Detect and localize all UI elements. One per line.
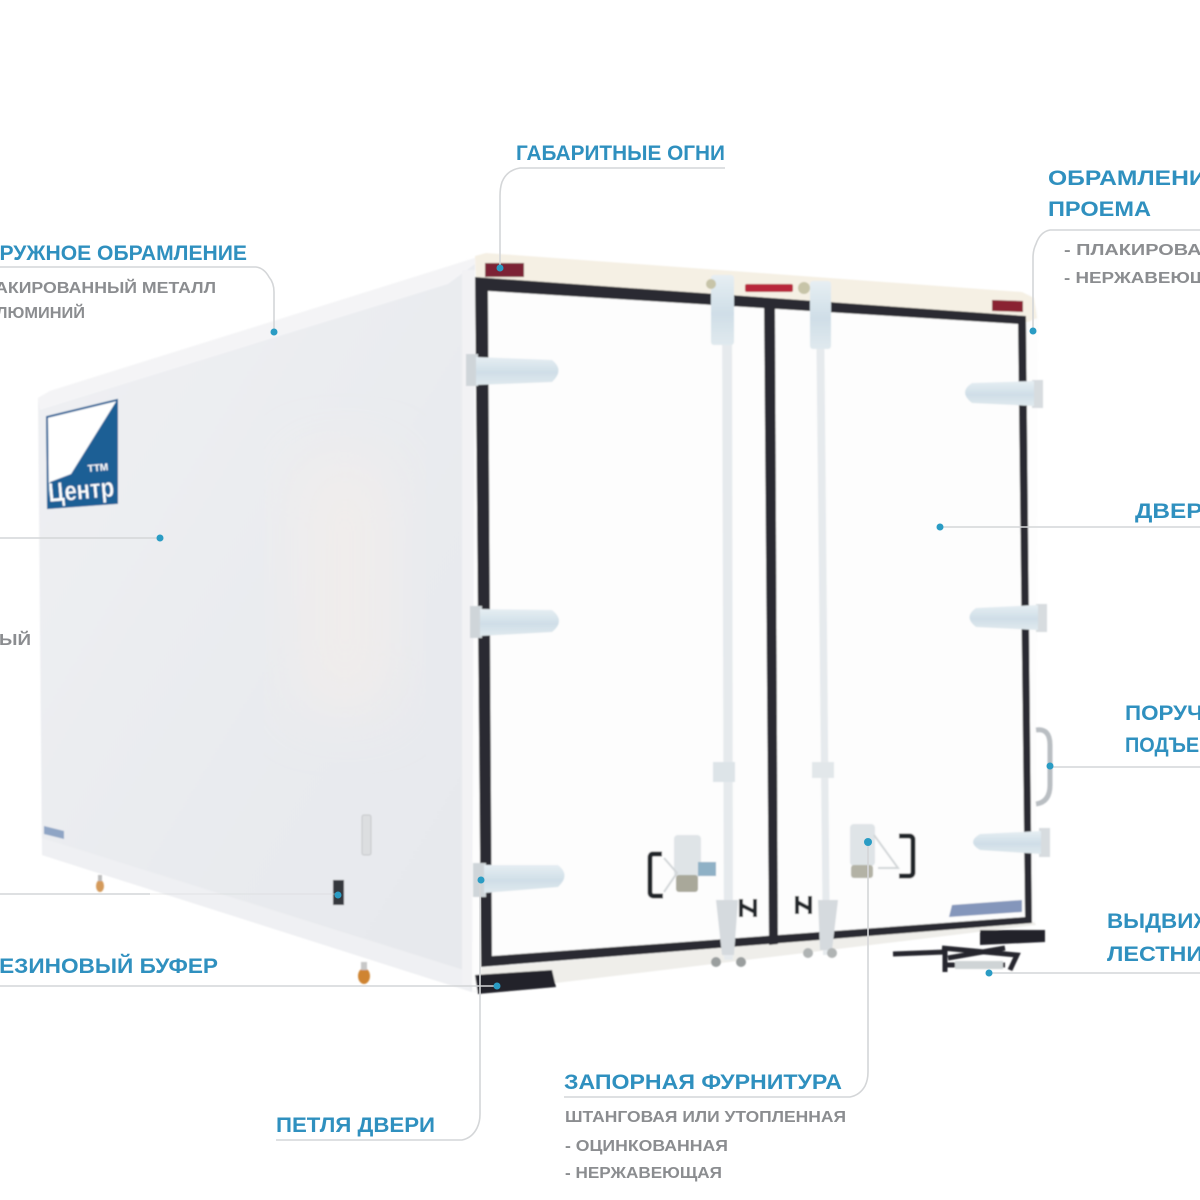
logo: ТТМ [87, 462, 109, 475]
lock rods [706, 275, 838, 967]
callout: боковая панель [0, 534, 164, 649]
callout: петля двери: ПЕТЛЯ ДВЕРИ [276, 1113, 435, 1137]
callout: габаритные огни [496, 141, 725, 272]
feet [96, 875, 370, 984]
logo [47, 400, 117, 508]
callout: двери [936, 499, 1200, 530]
callout: габаритные огни: ГАБАРИТНЫЕ ОГНИ [516, 141, 725, 165]
callout: обрамление проема: ОБРАМЛЕНИЕ [1048, 166, 1200, 190]
callout: запорная фурнитура: ЗАПОРНАЯ ФУРНИТУРА [564, 1070, 842, 1094]
door lock handles [650, 824, 1022, 917]
callout: поручень подъема [1046, 701, 1200, 770]
logo: Центр [47, 472, 115, 508]
callout: выдвижная лестница [986, 909, 1200, 976]
callout: запорная фурнитура: - НЕРЖАВЕЮЩАЯ [565, 1165, 722, 1182]
door seal frame [475, 277, 1032, 967]
side details: vent and small label [44, 815, 371, 905]
callout: наружное обрамление [0, 241, 278, 336]
rubber buffers and ladder [475, 930, 1045, 994]
marker lights [485, 263, 1023, 312]
van box body [38, 253, 1050, 994]
callout: резиновый буфер [0, 953, 500, 990]
grab handle [1036, 730, 1050, 804]
callout: запорная фурнитура: ШТАНГОВАЯ ИЛИ УТОПЛЕННАЯ [565, 1109, 846, 1126]
rear face [472, 253, 1038, 992]
callout: нижняя линия слева [0, 892, 342, 898]
callout: запорная фурнитура: - ОЦИНКОВАННАЯ [565, 1138, 728, 1155]
door hinges [466, 354, 1050, 897]
side panel [38, 258, 478, 992]
callout: обрамление проема: ПРОЕМА [1048, 197, 1151, 221]
callout: запорная фурнитура [564, 838, 872, 1182]
callout: обрамление проема [1030, 166, 1200, 334]
callout: петля двери [276, 876, 484, 1140]
